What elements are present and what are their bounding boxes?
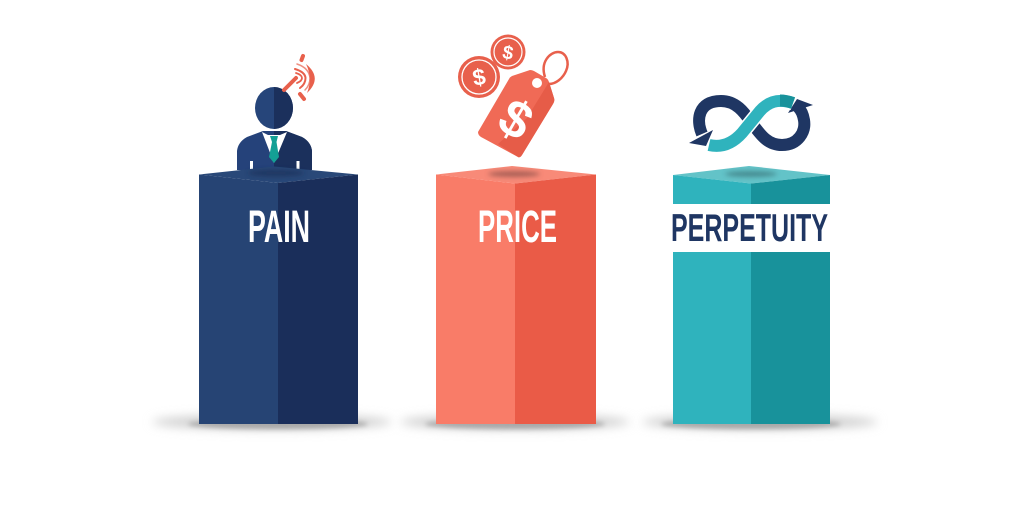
signal waves: [284, 56, 310, 99]
head: [255, 87, 293, 129]
front left face: [436, 174, 515, 424]
top shadow: [725, 171, 777, 177]
front right face: [751, 175, 830, 424]
white gap behind ribbon: [709, 101, 793, 146]
top shadow: [488, 171, 540, 177]
icon: price tag and coins: [458, 34, 568, 157]
coin: small: $: [501, 42, 515, 65]
label: PRICE: PRICE: [478, 201, 557, 252]
ground shadow: price: [400, 414, 630, 430]
pillar: pain: [152, 56, 392, 430]
tag dollar sign: $: [488, 88, 543, 152]
white label band: [668, 204, 834, 252]
pillar top: [199, 166, 358, 183]
tag loop: [544, 52, 568, 84]
navy loop: [699, 101, 804, 145]
coin: large: $: [470, 63, 488, 91]
front right face: [515, 174, 596, 424]
arm lines: [250, 161, 300, 169]
teal ribbon: [709, 101, 793, 146]
front right face: [278, 174, 358, 424]
label: PAIN: PAIN: [248, 201, 310, 252]
pillar top: [673, 166, 830, 184]
ground shadow: perpetuity: [642, 414, 878, 430]
tag hole: [532, 78, 542, 88]
shirt collar: [262, 132, 287, 163]
ground shadow: pain: [152, 414, 392, 430]
tag shading: [498, 82, 554, 157]
tag body: [478, 70, 554, 157]
pillar top: [436, 166, 596, 184]
pillar: price: [400, 34, 630, 430]
left arrowhead: [689, 130, 713, 146]
icon: infinity arrows: [689, 99, 813, 146]
front left face: [673, 175, 751, 424]
label: PERPETUITY: PERPETUITY: [671, 207, 828, 250]
shoulders: [237, 131, 312, 170]
icon: person with signal: [237, 56, 315, 170]
tie: [269, 136, 279, 163]
right arrowhead: [788, 99, 813, 113]
front left face: [199, 174, 278, 424]
signal crescent: [306, 64, 315, 93]
pillar: perpetuity: [642, 99, 878, 430]
teal ribbon end: [780, 100, 793, 103]
top shadow: [248, 170, 304, 176]
